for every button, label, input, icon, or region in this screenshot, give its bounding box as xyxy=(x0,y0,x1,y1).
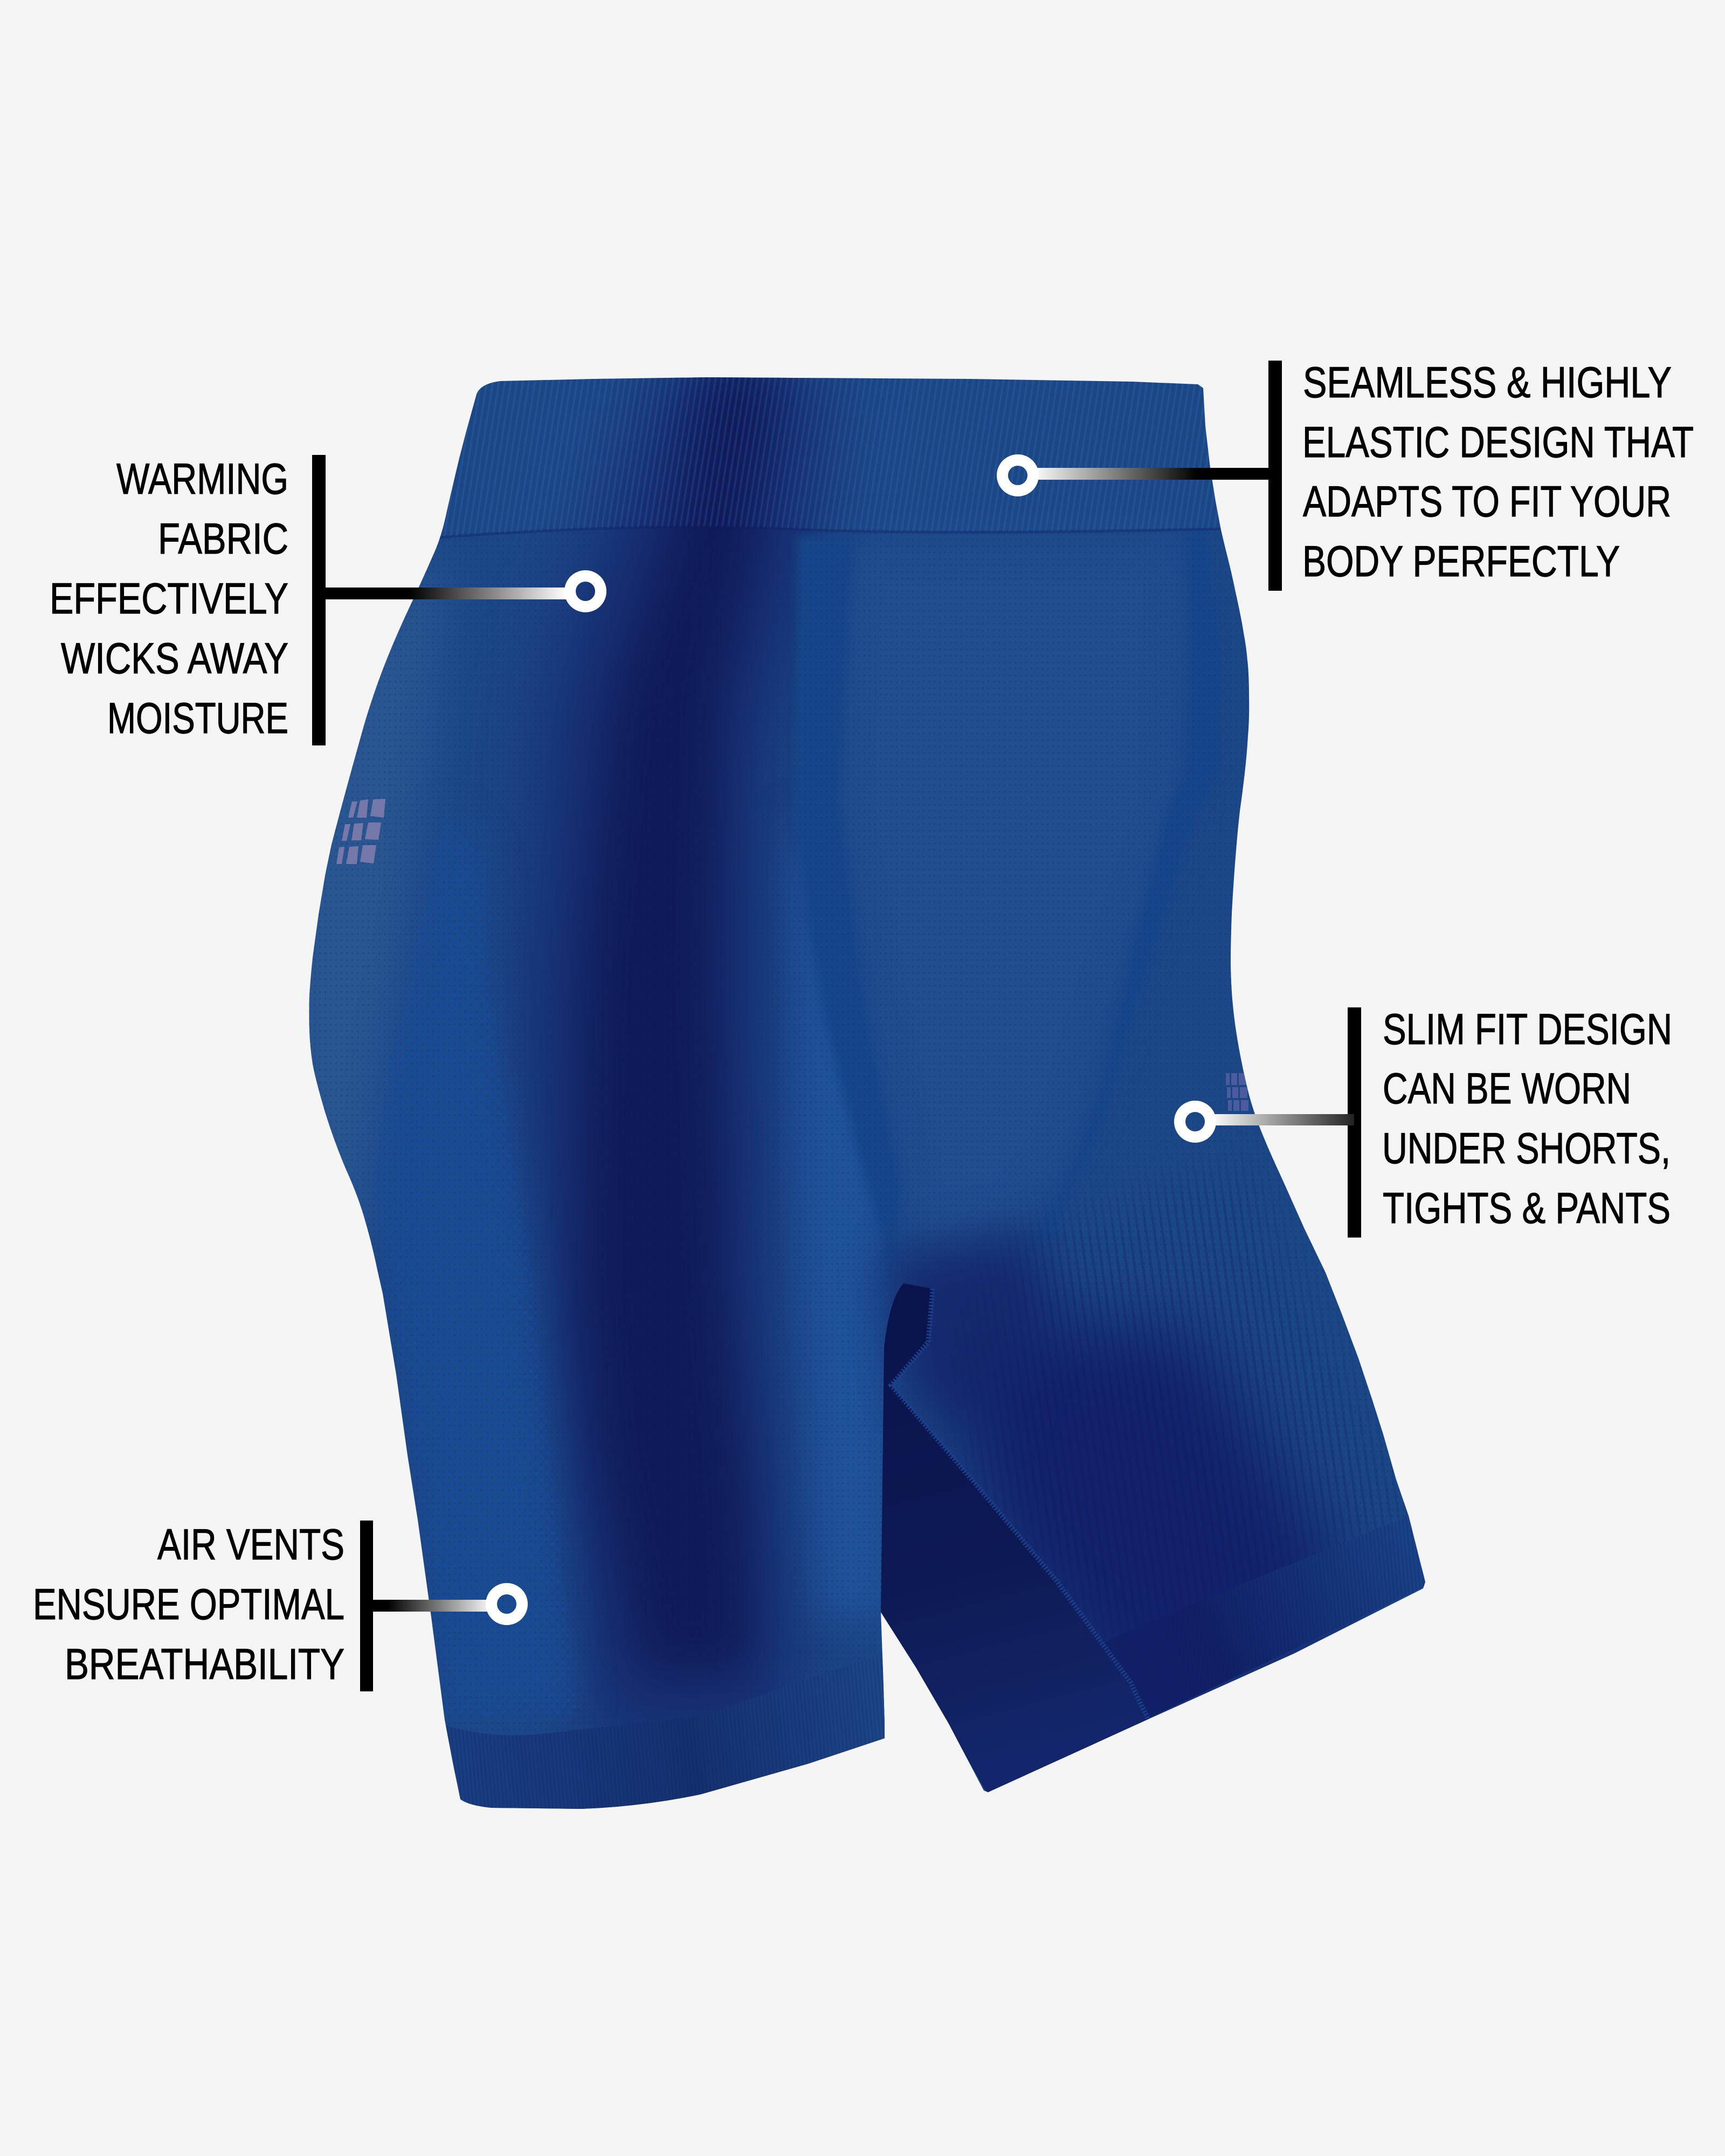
waistband xyxy=(431,372,1240,544)
dark central fold band xyxy=(582,367,782,1671)
callout: air vents xyxy=(33,1521,522,1691)
left side seam stripe xyxy=(797,536,896,1229)
mesh ventilation panel xyxy=(372,813,577,1719)
marker ring xyxy=(1179,1106,1211,1137)
text: warming fabric description: WARMING xyxy=(116,455,288,503)
right logo xyxy=(1226,1073,1248,1111)
crotch shadow xyxy=(884,1229,1057,1428)
callout: slim fit design xyxy=(1179,1005,1672,1238)
text: warming fabric description: FABRIC xyxy=(158,515,288,563)
connector line xyxy=(1208,1114,1354,1125)
text: slim fit description: CAN BE WORN xyxy=(1383,1065,1631,1113)
bracket bar xyxy=(360,1521,373,1691)
text: air vents description: BREATHABILITY xyxy=(65,1640,344,1689)
text: warming fabric description: WICKS AWAY xyxy=(61,634,288,683)
right leg shading xyxy=(933,1315,1369,1736)
light left hip edge xyxy=(309,545,437,1250)
product photo: blue compression shorts xyxy=(270,350,1455,1833)
left leg hem xyxy=(443,1652,887,1816)
text: air vents description xyxy=(33,1521,344,1689)
marker ring xyxy=(570,576,601,607)
inseam stitching xyxy=(891,1289,1149,1720)
bracket bar xyxy=(1268,361,1282,591)
marker ring xyxy=(492,1589,522,1619)
bracket bar xyxy=(1348,1007,1361,1238)
text: air vents description: AIR VENTS xyxy=(157,1521,344,1569)
right leg hem xyxy=(946,1516,1429,1795)
light inner thigh of left leg xyxy=(792,808,889,1617)
text: seamless design description: BODY PERFECTLY xyxy=(1302,537,1620,586)
callout: seamless design xyxy=(1003,358,1694,591)
inner leg panel xyxy=(881,1283,1149,1795)
text: slim fit description xyxy=(1382,1005,1672,1233)
callout: warming fabric xyxy=(50,455,601,745)
text: warming fabric description xyxy=(50,455,288,743)
front centre panel xyxy=(855,565,888,653)
right side seam stripe xyxy=(1023,530,1221,1255)
text: seamless design description xyxy=(1302,358,1694,586)
connector line xyxy=(367,1600,496,1612)
text: warming fabric description: MOISTURE xyxy=(107,694,288,743)
textures xyxy=(270,528,1455,1822)
marker ring xyxy=(1003,460,1033,490)
connector line xyxy=(326,588,571,599)
bracket bar xyxy=(312,455,326,745)
text: air vents description: ENSURE OPTIMAL xyxy=(33,1580,344,1629)
text: warming fabric description: EFFECTIVELY xyxy=(50,575,288,623)
wide soft shading around the central fold xyxy=(523,367,830,1752)
connector line xyxy=(1031,468,1271,480)
icon: left brand logo grid xyxy=(336,799,385,864)
